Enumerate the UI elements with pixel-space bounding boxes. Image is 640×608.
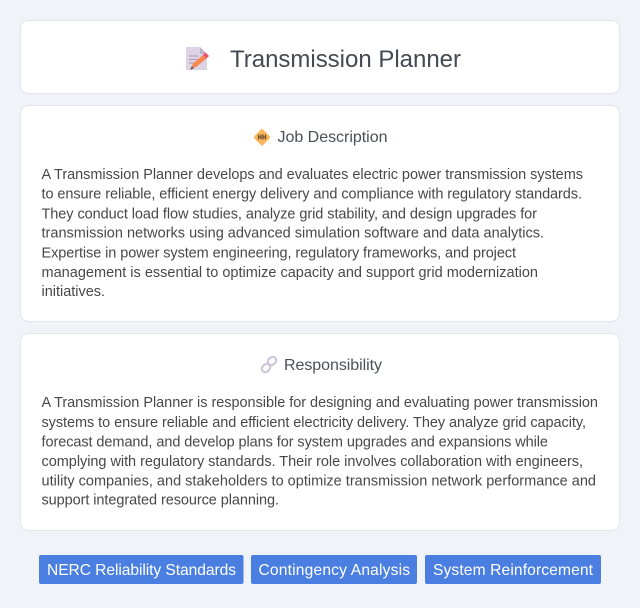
text block: job description: to ensure reliable, efficient energy delivery and compliance with regulatory standards. (42, 187, 582, 203)
text block: job description: Expertise in power system engineering, regulatory frameworks, and project (42, 245, 516, 261)
tag: System Reinforcement: System Reinforcement (433, 562, 594, 579)
text block: job description (42, 167, 583, 300)
tag: NERC Reliability Standards: NERC Reliability Standards (47, 562, 236, 579)
tag: NERC Reliability Standards (39, 555, 244, 584)
icon: chain link (260, 355, 278, 374)
text block: responsibility: utility companies, and stakeholders to optimize transmission network performance and (42, 473, 596, 489)
tag: Contingency Analysis (251, 555, 417, 584)
text block: responsibility: systems to ensure reliable and efficient electricity delivery. They analyze grid capacity, (42, 415, 586, 431)
icon: diamond sign (255, 130, 269, 145)
panel: title card (20, 20, 620, 94)
title: Transmission Planner (230, 46, 461, 73)
text block: job description: management is essential to optimize capacity and support grid modernization (42, 265, 538, 281)
text block: responsibility (42, 395, 598, 508)
panel: responsibility (20, 334, 620, 530)
text block: responsibility: support integrated resource planning. (42, 492, 279, 508)
text block: responsibility: complying with regulatory standards. Their role involves collaboration with engineers, (42, 454, 583, 470)
text block: responsibility: A Transmission Planner is responsible for designing and evaluating power transmission (42, 395, 598, 411)
panel: job description (20, 106, 620, 322)
heading: responsibility: Responsibility (284, 357, 382, 374)
tag: System Reinforcement (425, 555, 601, 584)
text block: job description: initiatives. (42, 284, 105, 300)
heading: job description: Job Description (278, 129, 388, 146)
text block: job description: They conduct load flow studies, analyze grid stability, and design upgrades for (42, 206, 537, 222)
text block: job description: A Transmission Planner develops and evaluates electric power transmission systems (42, 167, 583, 183)
icon: document with pencil (186, 47, 209, 70)
text block: responsibility: forecast demand, and develop plans for system upgrades and expansions while (42, 434, 548, 450)
tag: Contingency Analysis: Contingency Analysis (258, 562, 410, 579)
text block: job description: transmission networks using advanced simulation software and data analytics. (42, 226, 544, 242)
